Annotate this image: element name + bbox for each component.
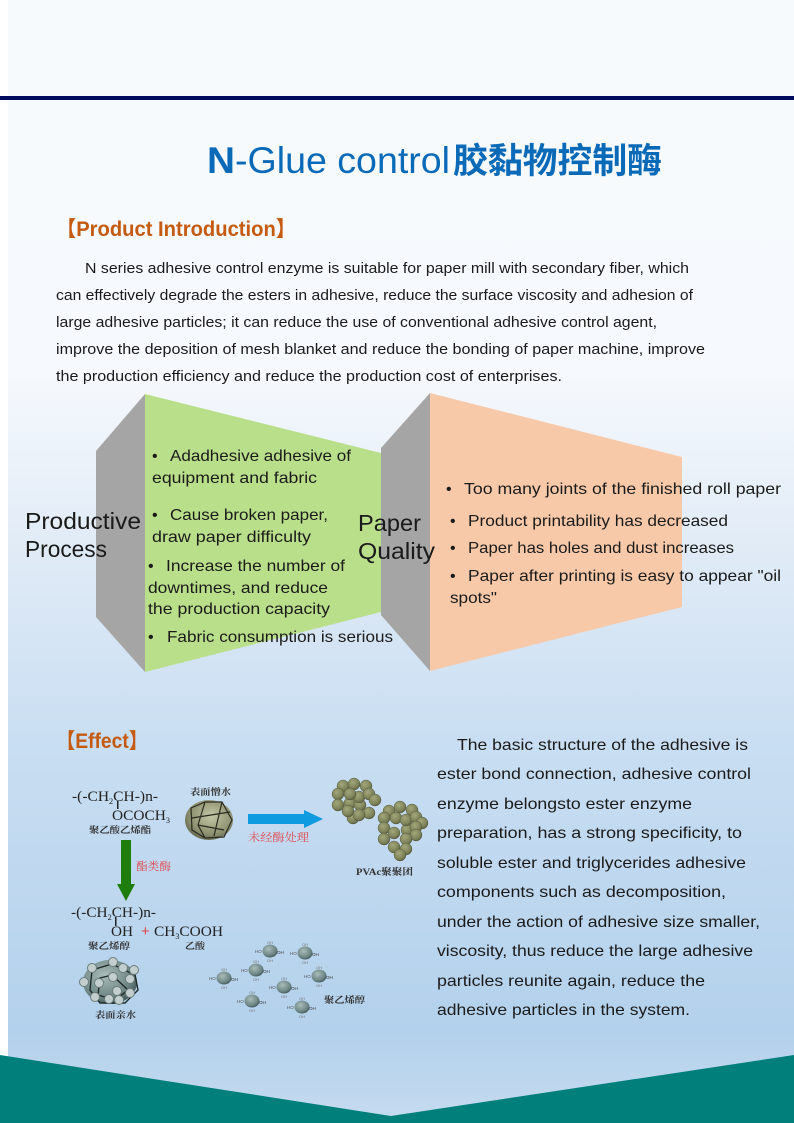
heading: effect: 【Effect】 <box>56 730 148 753</box>
label: esterase: 酯类酶 <box>136 858 171 874</box>
hydrophobic particle <box>185 785 233 840</box>
label: paper quality <box>358 510 435 564</box>
intro paragraph: large adhesive particles; it can reduce the use of conventional adhesive control agent, <box>56 314 657 331</box>
plus sign: + <box>141 923 150 940</box>
title: 胶黏物控制酶 <box>453 133 662 184</box>
formula: polyvinyl alcohol: -(-CH <box>71 905 107 921</box>
effect paragraph: soluble ester and triglycerides adhesive <box>437 855 746 872</box>
label: productive process <box>25 508 141 562</box>
formula: polyvinyl alcohol <box>71 905 156 952</box>
formula: polyvinyl alcohol: 聚乙烯醇 <box>88 939 130 952</box>
formula: acetic acid: 3 <box>175 932 179 941</box>
arrow: green <box>117 840 135 901</box>
reaction diagram <box>71 778 428 1021</box>
bullet list: quality problems: spots" <box>450 590 497 607</box>
bullet list: process problems: Fabric consumption is serious <box>167 629 393 646</box>
formula: acetic acid: COOH <box>179 924 223 940</box>
label: productive process: Productive <box>25 508 141 534</box>
hydrophobic particle: 表面憎水 <box>190 785 231 798</box>
intro paragraph: can effectively degrade the esters in adhesive, reduce the surface viscosity and adhesion of <box>56 287 694 304</box>
label: paper quality: Quality <box>358 538 435 564</box>
effect paragraph: preparation, has a strong specificity, to <box>437 825 742 842</box>
effect paragraph: particles reunite again, reduce the <box>437 973 705 990</box>
bullet list: quality problems: Paper has holes and dust increases <box>468 540 734 557</box>
bullet list: process problems: equipment and fabric <box>152 470 317 487</box>
label: polyvinyl alcohol: 聚乙烯醇 <box>324 993 365 1006</box>
formula: acetic acid: 乙酸 <box>185 939 206 952</box>
hydrophilic particle <box>80 958 138 1004</box>
bullet list: process problems <box>148 448 393 646</box>
formula: polyvinyl acetate: OCOCH <box>112 808 165 824</box>
label: hydrophilic: 表面亲水 <box>95 1008 136 1021</box>
bullet list: process problems: • <box>148 629 154 646</box>
bullet list: process problems: Cause broken paper, <box>170 507 328 524</box>
effect paragraph: adhesive particles in the system. <box>437 1002 690 1019</box>
bullet list: quality problems: • <box>450 568 456 585</box>
bullet list: process problems: • <box>148 558 154 575</box>
intro paragraph: N series adhesive control enzyme is suitable for paper mill with secondary fiber, which <box>85 260 689 277</box>
bullet list: quality problems: • <box>450 513 456 530</box>
bullet list: quality problems: • <box>446 481 452 498</box>
effect paragraph: enzyme belongsto ester enzyme <box>437 796 692 813</box>
label: PVAc: PVAc聚聚团 <box>356 866 414 878</box>
orange face <box>430 393 682 671</box>
bullet list: quality problems: Too many joints of the finished roll paper <box>464 481 782 498</box>
header rule <box>0 96 794 100</box>
green face <box>145 394 381 672</box>
intro paragraph <box>56 260 705 385</box>
formula: acetic acid: CH <box>154 924 175 940</box>
grey side face <box>381 393 430 671</box>
footer band <box>0 1055 794 1123</box>
label: paper quality: Paper <box>358 510 421 536</box>
intro paragraph: the production efficiency and reduce the production cost of enterprises. <box>56 368 562 385</box>
title <box>207 133 662 184</box>
bullet list: quality problems: Paper after printing is easy to appear "oil <box>468 568 781 585</box>
grey side face <box>96 394 145 672</box>
title: N <box>207 140 235 181</box>
effect paragraph: The basic structure of the adhesive is <box>457 737 748 754</box>
bullet list: process problems: draw paper difficulty <box>152 529 311 546</box>
panel: paper quality <box>358 393 782 671</box>
effect paragraph <box>437 737 760 1019</box>
heading: product introduction: 【Product Introduction】 <box>56 218 296 241</box>
label: untreated: 未经酶处理 <box>248 829 309 845</box>
formula: polyvinyl acetate <box>72 789 170 836</box>
formula: polyvinyl alcohol: 2 <box>108 913 112 922</box>
effect paragraph: components such as decomposition, <box>437 884 726 901</box>
bullet list: quality problems <box>446 481 782 607</box>
title: -Glue control <box>235 140 450 181</box>
formula: polyvinyl alcohol: CH-)n- <box>112 905 156 921</box>
intro paragraph: improve the deposition of mesh blanket and reduce the bonding of paper machine, improve <box>56 341 705 358</box>
formula: polyvinyl acetate: 2 <box>109 797 113 806</box>
formula: acetic acid <box>154 924 223 952</box>
formula: polyvinyl acetate: 3 <box>166 816 170 825</box>
arrow: blue <box>248 810 323 828</box>
polyvinyl alcohol molecules <box>209 940 333 1019</box>
label: productive process: Process <box>25 536 107 562</box>
formula: polyvinyl acetate: 聚乙酸乙烯酯 <box>89 823 151 836</box>
formula: polyvinyl alcohol: OH <box>111 924 133 940</box>
formula: polyvinyl acetate: CH-)n- <box>113 789 158 805</box>
effect paragraph: ester bond connection, adhesive control <box>437 766 751 783</box>
bullet list: process problems: the production capacity <box>148 601 330 618</box>
PVAc agglomerate <box>332 778 428 861</box>
bullet list: process problems: downtimes, and reduce <box>148 580 328 597</box>
bullet list: quality problems: • <box>450 540 456 557</box>
bullet list: process problems: Adadhesive adhesive of <box>170 448 352 465</box>
bullet list: process problems: • <box>152 507 158 524</box>
effect paragraph: under the action of adhesive size smaller, <box>437 914 760 931</box>
bullet list: process problems: Increase the number of <box>166 558 346 575</box>
bullet list: quality problems: Product printability has decreased <box>468 513 728 530</box>
bullet list: process problems: • <box>152 448 158 465</box>
effect paragraph: viscosity, thus reduce the large adhesive <box>437 943 753 960</box>
panel: productive process <box>25 394 393 672</box>
formula: polyvinyl acetate: -(-CH <box>72 789 108 805</box>
